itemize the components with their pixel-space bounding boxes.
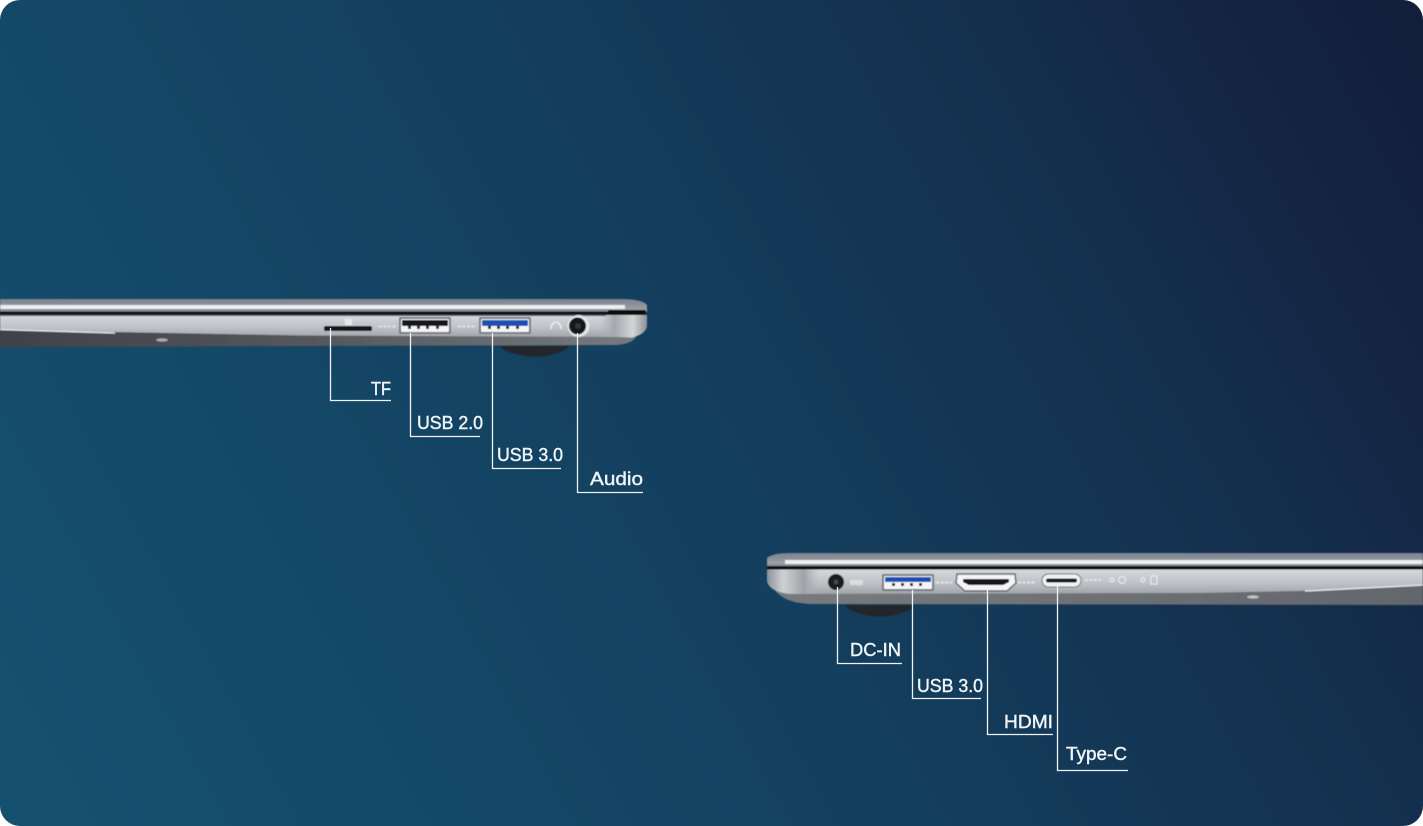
icon: USB symbol [379, 326, 396, 328]
laptop: right side view [767, 553, 1423, 616]
port: USB 3.0 [882, 574, 934, 591]
callout: Audio [578, 333, 643, 492]
callout: USB 3.0 left: USB 3.0 [497, 444, 563, 465]
left laptop foot [500, 346, 569, 356]
left laptop underside [0, 328, 640, 347]
right laptop foot [845, 605, 915, 616]
port: Type-C [1042, 574, 1081, 587]
callout: DC-IN [838, 587, 902, 664]
callout: Audio: Audio [590, 468, 643, 489]
right laptop lid [767, 553, 1423, 566]
icon: USB symbol [458, 326, 475, 328]
left laptop body [0, 315, 647, 338]
left laptop lid [0, 299, 647, 312]
right laptop underside [772, 586, 1423, 605]
port: audio jack [568, 315, 590, 337]
callout: Type-C: Type-C [1066, 743, 1127, 764]
icon: DC symbol [850, 580, 863, 585]
callout: USB 3.0 right: USB 3.0 [917, 675, 983, 696]
icon: USB symbol [1085, 579, 1101, 581]
port: DC-IN [828, 574, 844, 590]
port: USB 2.0 [399, 317, 451, 334]
callout: USB 2.0: USB 2.0 [417, 412, 483, 433]
right laptop body [767, 569, 1423, 594]
callout: TF [330, 328, 391, 400]
callout: DC-IN: DC-IN [850, 639, 901, 660]
icon: USB symbol [936, 582, 952, 584]
callout: TF: TF [371, 378, 391, 399]
laptop: left side view [0, 299, 647, 356]
icon: headphones [551, 322, 561, 329]
icon: HDMI symbol [1018, 582, 1035, 584]
port: TF slot [324, 319, 372, 331]
icon: status lights [1110, 576, 1157, 584]
callout: Type-C [1058, 585, 1128, 770]
port: HDMI opening [963, 579, 1009, 585]
callout: USB 2.0 [410, 333, 483, 436]
left laptop corner [600, 315, 647, 338]
right laptop corner [767, 569, 820, 594]
callout: USB 3.0 left [492, 333, 563, 468]
port: USB 3.0 [479, 317, 531, 334]
port: HDMI [956, 574, 1016, 591]
callout: HDMI: HDMI [1004, 711, 1053, 732]
callout: USB 3.0 right [912, 590, 983, 698]
callout: HDMI [988, 590, 1053, 734]
